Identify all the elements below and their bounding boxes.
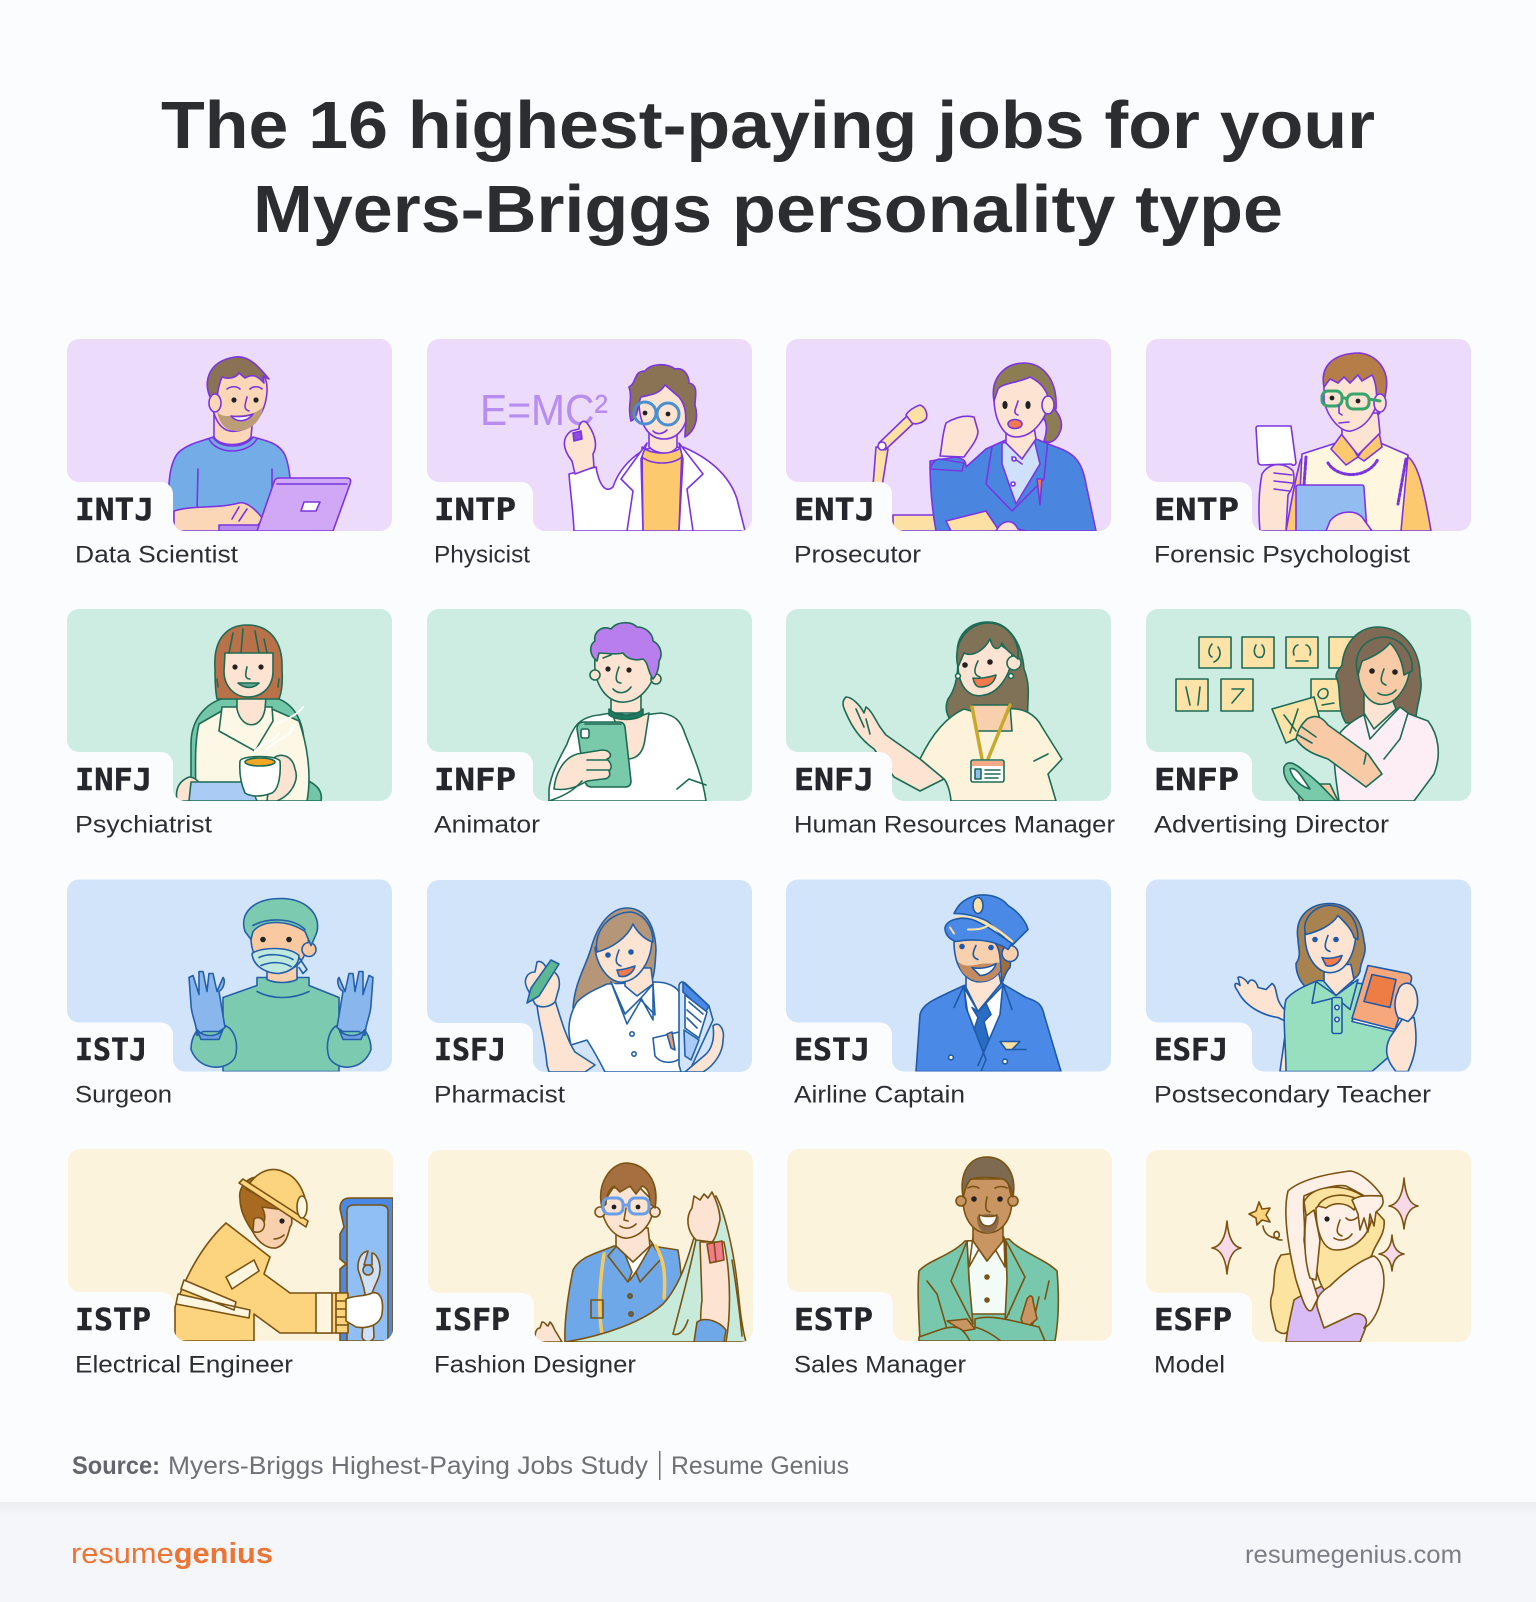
card: ENTP Forensic Psychologist: [1146, 339, 1471, 568]
card: ISFP Fashion Designer: [428, 1150, 753, 1378]
type label: ISTJ: [75, 1033, 147, 1068]
card: ENFJ Human Resources Manager: [786, 609, 1115, 838]
job title: Human Resources Manager: [794, 812, 1115, 838]
illustration: HR manager with badge: [843, 622, 1062, 801]
logo: resumegenius: [71, 1538, 273, 1570]
illustration: psychologist with card and tablet: [1256, 353, 1431, 531]
card: ISFJ Pharmacist: [427, 880, 752, 1108]
illustration: surgeon with gloves and mask: [189, 898, 373, 1072]
job title: Postsecondary Teacher: [1154, 1082, 1431, 1108]
card: ESFP Model: [1146, 1150, 1471, 1378]
type label: ENTJ: [794, 493, 875, 528]
type label: ISFJ: [434, 1033, 506, 1068]
card: ENFP Advertising Director: [1146, 609, 1471, 838]
source line: Resume Genius: [671, 1452, 849, 1480]
card: INTP Physicist: [427, 339, 752, 568]
job title: Sales Manager: [794, 1352, 966, 1378]
title: The 16 highest-paying jobs for your: [161, 88, 1375, 163]
type label: ESFJ: [1154, 1033, 1228, 1068]
title: Myers-Briggs personality type: [253, 172, 1283, 247]
illustration: teacher with book: [1235, 904, 1418, 1072]
title: [161, 88, 1375, 247]
card: INTJ Data Scientist: [67, 339, 392, 568]
card: ISTJ Surgeon: [67, 880, 392, 1108]
card: ENTJ Prosecutor: [786, 339, 1111, 568]
job title: Advertising Director: [1154, 812, 1389, 838]
job title: Prosecutor: [794, 542, 921, 568]
card: ISTP Electrical Engineer: [68, 1149, 393, 1378]
illustration: electrical engineer fixing panel: [175, 1170, 393, 1342]
illustration: model posing with sparkles: [1212, 1171, 1418, 1342]
job title: Surgeon: [75, 1082, 172, 1108]
job title: Animator: [434, 812, 540, 838]
illustration: physicist at blackboard: [480, 365, 745, 531]
job title: Forensic Psychologist: [1154, 542, 1410, 568]
illustration: airline captain in uniform: [916, 895, 1061, 1072]
card: ESTJ Airline Captain: [786, 880, 1111, 1108]
type label: ENFP: [1154, 763, 1239, 798]
type label: ENFJ: [794, 763, 874, 798]
job title: Psychiatrist: [75, 812, 212, 838]
card: ESTP Sales Manager: [787, 1149, 1112, 1378]
job title: Model: [1154, 1352, 1225, 1378]
job title: Data Scientist: [75, 542, 238, 568]
illustration: advertising director with sticky notes: [1176, 627, 1438, 801]
illustration: sales manager with crossed arms: [918, 1157, 1058, 1341]
type label: INFP: [434, 763, 516, 798]
source line: Source:: [72, 1452, 160, 1480]
card: ESFJ Postsecondary Teacher: [1146, 880, 1471, 1108]
source line: Myers-Briggs Highest-Paying Jobs Study: [168, 1452, 649, 1480]
illustration: pharmacist with clipboard and pen: [525, 908, 723, 1072]
job title: Physicist: [434, 542, 530, 568]
type label: INTP: [434, 493, 516, 528]
illustration: data scientist with laptop: [169, 357, 351, 531]
footer bar: [0, 1502, 1536, 1602]
type label: ISFP: [434, 1303, 510, 1338]
type label: ESTJ: [794, 1033, 870, 1068]
illustration: fashion designer with fabric: [535, 1163, 746, 1342]
type label: ISTP: [75, 1303, 151, 1338]
card: INFJ Psychiatrist: [67, 609, 392, 838]
type label: INTJ: [75, 493, 154, 528]
job title: Airline Captain: [794, 1082, 965, 1108]
type label: ESFP: [1154, 1303, 1232, 1338]
type label: ENTP: [1154, 493, 1239, 528]
illustration: prosecutor speaking at microphone: [872, 363, 1096, 531]
illustration: psychiatrist with coffee: [176, 625, 321, 801]
illustration: physicist at blackboard: E=MC²: [480, 386, 608, 435]
job title: Electrical Engineer: [75, 1352, 293, 1378]
source line: [72, 1451, 849, 1480]
website: resumegenius.com: [1245, 1541, 1462, 1569]
type label: INFJ: [75, 763, 152, 798]
job title: Fashion Designer: [434, 1352, 636, 1378]
job title: Pharmacist: [434, 1082, 565, 1108]
illustration: animator with tablet: [549, 623, 706, 801]
card: INFP Animator: [427, 609, 752, 838]
type label: ESTP: [794, 1303, 873, 1338]
